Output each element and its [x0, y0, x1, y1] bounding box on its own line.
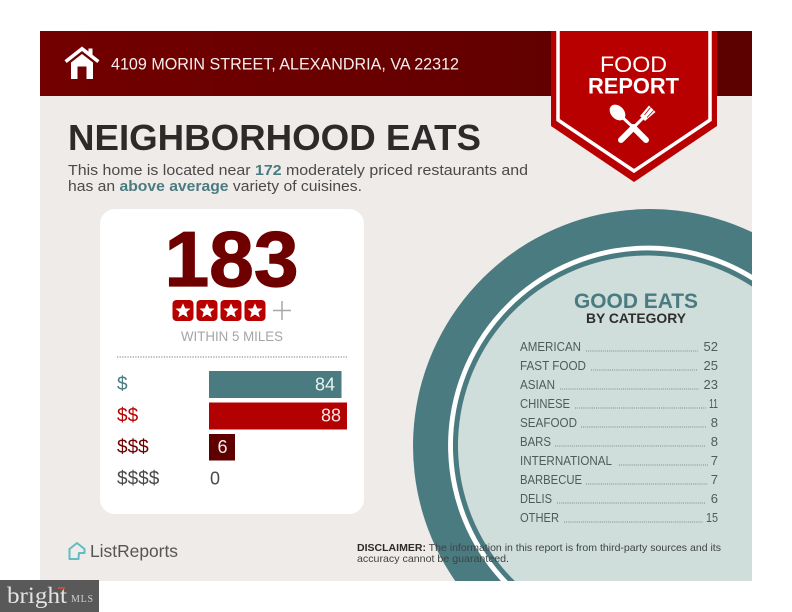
icon: listreports house [70, 543, 84, 559]
category list: 8 [711, 415, 718, 430]
category list: FAST FOOD [520, 358, 586, 373]
badge: food report: REPORT [588, 74, 679, 98]
icon: star rating [172, 300, 291, 321]
bar chart: price tiers: $$ [117, 406, 139, 426]
badge text: FOOD [600, 52, 667, 77]
icon: house [64, 46, 100, 79]
header band [40, 31, 752, 96]
bar chart: price tiers: 84 [315, 374, 335, 394]
category list: OTHER [520, 510, 559, 525]
category list: AMERICAN [520, 339, 581, 354]
disclaimer: accuracy cannot be guaranteed. [357, 553, 509, 565]
category list: CHINESE [520, 396, 570, 411]
category list: 25 [704, 358, 718, 373]
badge: food report [551, 31, 717, 182]
bar chart: price tiers: 88 [321, 406, 341, 426]
intro text [68, 162, 528, 195]
disclaimer [357, 542, 721, 565]
category list: BARBECUE [520, 472, 582, 487]
category list: 15 [706, 510, 718, 525]
category list [520, 339, 718, 525]
heading: good eats: GOOD EATS [574, 290, 698, 313]
bar chart: price tiers: $ [117, 374, 128, 395]
total count: 183 [164, 215, 298, 303]
bar chart: price tiers: $$$$ [117, 468, 160, 490]
panel: restaurant count card [100, 209, 364, 514]
category list: ASIAN [520, 377, 555, 392]
panel: good eats circle [413, 209, 752, 581]
category list: 23 [704, 377, 718, 392]
bar chart: price tiers: $$$ [117, 437, 149, 458]
category list: 52 [704, 339, 718, 354]
bar chart: price tiers: 0 [210, 468, 220, 488]
category list: SEAFOOD [520, 415, 577, 430]
category list: BARS [520, 434, 551, 449]
bar chart: price tiers [117, 371, 347, 490]
category list: 6 [711, 491, 718, 506]
title: NEIGHBORHOOD EATS [68, 117, 481, 158]
address: 4109 MORIN STREET, ALEXANDRIA, VA 22312 [111, 56, 459, 74]
disclaimer: DISCLAIMER: The information in this report is from third-party sources and its [357, 542, 721, 554]
category list: 8 [711, 434, 718, 449]
logo: listreports: ListReports [90, 541, 178, 561]
bar chart: price tiers: 6 [217, 437, 228, 457]
icon: spoon and fork [607, 102, 656, 140]
category list: 7 [711, 453, 718, 468]
logo: bright mls: MLS [71, 594, 93, 605]
category list: DELIS [520, 491, 552, 506]
category list: 7 [711, 472, 718, 487]
within 5 miles: WITHIN 5 MILES [181, 328, 283, 344]
subheading: by category: BY CATEGORY [586, 310, 687, 326]
category list: 11 [709, 396, 718, 411]
intro text: This home is located near 172 moderately priced restaurants and [68, 162, 528, 179]
logo: bright mls: bright [7, 583, 68, 608]
category list: INTERNATIONAL [520, 453, 612, 468]
logo: bright mls [0, 580, 99, 612]
intro text: has an above average variety of cuisines. [68, 178, 362, 195]
